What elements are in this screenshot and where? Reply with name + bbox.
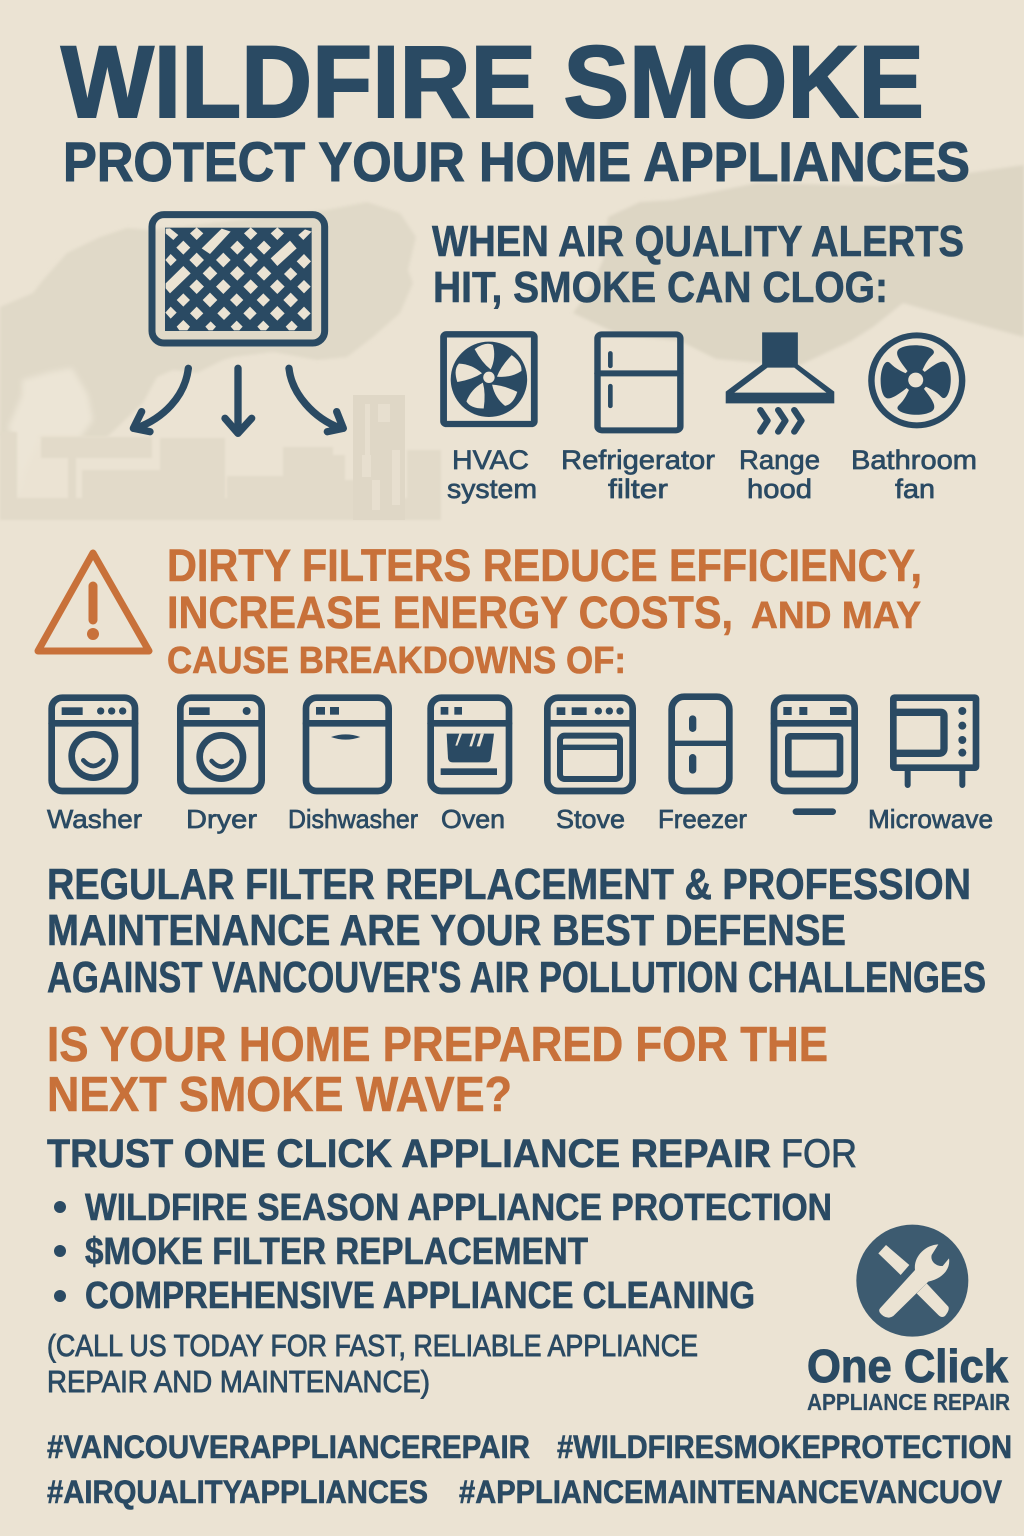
icon: oven <box>431 698 509 791</box>
labels: second appliance row: Stove <box>556 804 625 834</box>
logo: One Click Appliance Repair: One Click <box>807 1340 1008 1392</box>
background: smoke and city silhouette <box>0 165 1024 520</box>
text block: filter replacement and maintenance <box>47 860 986 1002</box>
service list: WILDFIRE SEASON APPLIANCE PROTECTION <box>85 1187 832 1229</box>
icon: HVAC system <box>444 334 534 424</box>
heading: air quality alerts: HIT, SMOKE CAN CLOG: <box>433 263 888 312</box>
icon: washer <box>52 698 135 791</box>
icon: refrigerator filter <box>597 334 680 430</box>
label: refrigerator filter <box>561 445 715 504</box>
label: bathroom fan: Bathroom <box>851 445 977 475</box>
service list <box>54 1187 832 1317</box>
call to action: (CALL US TODAY FOR FAST, RELIABLE APPLIANCE <box>47 1328 698 1363</box>
label: range hood <box>739 445 820 504</box>
label: range hood: Range <box>739 445 820 475</box>
warning text: DIRTY FILTERS REDUCE EFFICIENCY, <box>167 540 922 591</box>
labels: first appliance row: Dryer <box>186 804 257 834</box>
label: bathroom fan <box>851 445 977 504</box>
labels: second appliance row: Freezer <box>658 804 747 834</box>
label: refrigerator filter: Refrigerator <box>561 445 715 475</box>
label: bathroom fan: fan <box>895 474 935 504</box>
hashtags: #AIRQUALITYAPPLIANCES <box>47 1474 428 1510</box>
logo: One Click Appliance Repair <box>807 1225 1010 1415</box>
label: HVAC system: system <box>447 474 537 504</box>
call to action: REPAIR AND MAINTENANCE) <box>47 1364 430 1399</box>
title: WILDFIRE SMOKE <box>61 25 924 139</box>
labels: first appliance row: Dishwasher <box>288 804 418 834</box>
text block: filter replacement and maintenance: MAINTENANCE ARE YOUR BEST DEFENSE <box>47 906 846 955</box>
heading: smoke wave question: NEXT SMOKE WAVE? <box>47 1068 512 1122</box>
icon: clogged air filter with arrows <box>133 215 343 433</box>
hashtags <box>47 1429 1012 1510</box>
call to action <box>47 1328 698 1399</box>
labels: first appliance row <box>47 804 505 834</box>
icon: freezer <box>672 697 729 791</box>
warning text: AND MAY <box>751 595 921 637</box>
icon: microwave <box>893 698 976 785</box>
text: trust statement: TRUST ONE CLICK APPLIANCE REPAIR <box>47 1132 771 1176</box>
label: HVAC system: HVAC <box>452 445 529 475</box>
warning text: INCREASE ENERGY COSTS, <box>167 587 733 638</box>
service list: COMPREHENSIVE APPLIANCE CLEANING <box>85 1275 755 1317</box>
icon: bathroom fan <box>871 335 962 425</box>
text: trust statement: FOR <box>781 1132 857 1176</box>
heading: air quality alerts <box>432 217 964 312</box>
label: HVAC system <box>447 445 537 504</box>
labels: first appliance row: Washer <box>47 804 142 834</box>
icon: dishwasher <box>306 698 389 791</box>
warning text <box>167 540 922 682</box>
icon: wall oven <box>774 698 855 812</box>
light plume gap inside the smoke <box>8 368 93 500</box>
icon: warning triangle <box>38 553 149 651</box>
labels: second appliance row: Microwave <box>868 804 993 834</box>
label: refrigerator filter: filter <box>608 474 668 504</box>
warning text: CAUSE BREAKDOWNS OF: <box>167 640 626 682</box>
labels: second appliance row <box>556 804 993 834</box>
hashtags: #VANCOUVERAPPLIANCEREPAIR <box>47 1429 530 1465</box>
heading: smoke wave question: IS YOUR HOME PREPARED FOR THE <box>47 1018 828 1072</box>
icon: range hood <box>726 332 834 432</box>
icon: dryer <box>180 698 262 791</box>
icon: stove <box>547 698 633 791</box>
labels: first appliance row: Oven <box>441 804 505 834</box>
heading: smoke wave question <box>47 1018 828 1122</box>
service list: $MOKE FILTER REPLACEMENT <box>85 1231 588 1273</box>
label: range hood: hood <box>747 474 812 504</box>
